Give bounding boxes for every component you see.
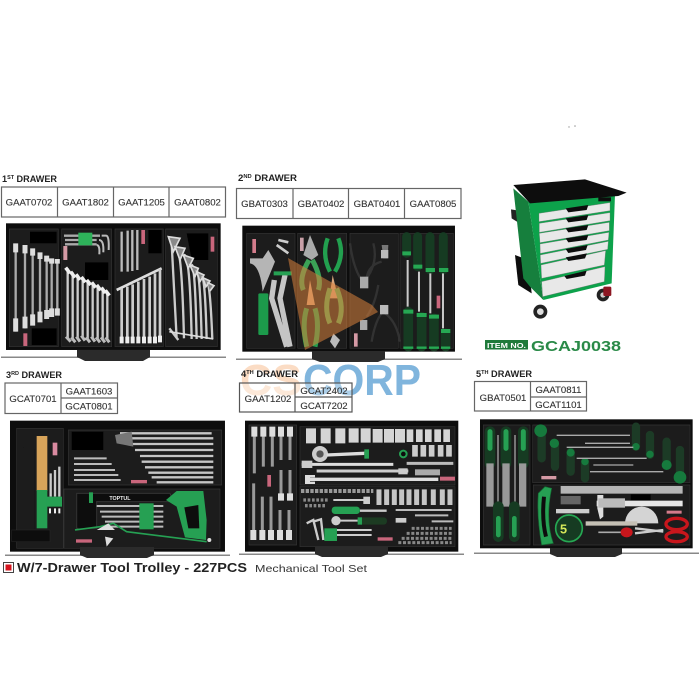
- small decorative dots above the trolley: [568, 125, 576, 128]
- table: 4th drawer item codes: GAAT1202: [245, 394, 291, 405]
- watermark: orange letters and wedge: CS: [240, 356, 302, 405]
- heading: 3rd drawer: DRAWER: [19, 370, 62, 380]
- footer title: trolley set: [4, 561, 367, 575]
- table: 3rd drawer item codes: [5, 383, 118, 414]
- drawer base and handle: [474, 548, 699, 557]
- drawer base and handle: [1, 350, 226, 361]
- heading: 5th drawer: DRAWER: [489, 369, 532, 379]
- drawer photo: pliers and screwdrivers: [242, 226, 455, 352]
- item number badge: ITEM NO.: [487, 341, 526, 350]
- table: 2nd drawer item codes: GBAT0402: [298, 199, 344, 210]
- table: 4th drawer item codes: GCAT2402: [300, 386, 348, 397]
- heading: 1st drawer: ST: [7, 175, 15, 181]
- table: 4th drawer item codes: [240, 383, 352, 412]
- table: 1st drawer item codes: [2, 187, 226, 217]
- drawer photo: hammer, hacksaw and wrenches: TOPTUL: [109, 496, 131, 502]
- table: 3rd drawer item codes: GCAT0801: [65, 402, 113, 412]
- drawer photo: files, hex keys and measuring tools: [480, 419, 693, 548]
- panel: 1st drawer: [1, 174, 226, 361]
- drawer base and handle: [239, 547, 464, 557]
- illustration: green seven-drawer tool trolley: [511, 179, 627, 319]
- drawer photo: files, hex keys and measuring tools: 5: [560, 522, 567, 536]
- heading: 2nd drawer: DRAWER: [252, 173, 297, 183]
- heading: 4th drawer: 4: [241, 369, 246, 379]
- footer title: trolley set: Mechanical Tool Set: [255, 563, 367, 575]
- heading: 2nd drawer: ND: [243, 174, 252, 180]
- table: 2nd drawer item codes: GBAT0303: [241, 199, 288, 210]
- drawer photo: sockets and ratchets: [245, 421, 458, 552]
- drawer base and handle: [5, 547, 230, 558]
- table: 1st drawer item codes: GAAT0802: [174, 198, 221, 208]
- panel: 2nd drawer: [236, 173, 462, 362]
- table: 1st drawer item codes: GAAT1802: [62, 198, 109, 208]
- table: 2nd drawer item codes: [236, 188, 461, 219]
- table: 3rd drawer item codes: GCAT0701: [9, 394, 57, 405]
- heading: 3rd drawer: RD: [11, 371, 19, 377]
- icon: red bullet square: [4, 562, 14, 572]
- heading: 1st drawer: DRAWER: [14, 174, 57, 184]
- drawer base and handle: [236, 351, 462, 362]
- heading: 5th drawer: TH: [481, 370, 489, 376]
- panel: 5th drawer: [474, 369, 699, 557]
- table: 2nd drawer item codes: GAAT0805: [410, 199, 456, 210]
- watermark: CORP: CORP: [303, 356, 421, 405]
- table: 2nd drawer item codes: GBAT0401: [354, 199, 400, 210]
- panel: trolley product: [485, 179, 627, 355]
- table: 3rd drawer item codes: GAAT1603: [66, 386, 112, 398]
- footer title: trolley set: W/7-Drawer Tool Trolley - 227PCS: [17, 561, 247, 575]
- drawer photo: hammer, hacksaw and wrenches: [10, 421, 225, 552]
- panel: 4th drawer: [239, 421, 464, 557]
- drawer photo: wrench sets: [6, 223, 221, 350]
- heading: 1st drawer: 1: [2, 174, 7, 184]
- table: 1st drawer item codes: GAAT1205: [118, 198, 165, 208]
- heading: 5th drawer: 5: [476, 369, 481, 379]
- heading: 3rd drawer: 3: [6, 370, 11, 380]
- item number badge: [485, 338, 621, 355]
- heading: 4th drawer: TH: [246, 370, 254, 376]
- watermark: orange letters and wedge: [240, 258, 378, 405]
- table: 5th drawer item codes: [474, 381, 587, 411]
- table: 1st drawer item codes: GAAT0702: [6, 198, 52, 208]
- table: 4th drawer item codes: GCAT7202: [300, 401, 348, 412]
- table: 5th drawer item codes: GBAT0501: [480, 393, 526, 404]
- table: 5th drawer item codes: GCAT1101: [535, 400, 582, 411]
- panel: 3rd drawer: [5, 370, 230, 558]
- item number badge: GCAJ0038: [531, 338, 621, 355]
- heading: 4th drawer: DRAWER: [254, 369, 298, 379]
- table: 5th drawer item codes: GAAT0811: [535, 385, 582, 396]
- heading: 2nd drawer: 2: [238, 173, 243, 183]
